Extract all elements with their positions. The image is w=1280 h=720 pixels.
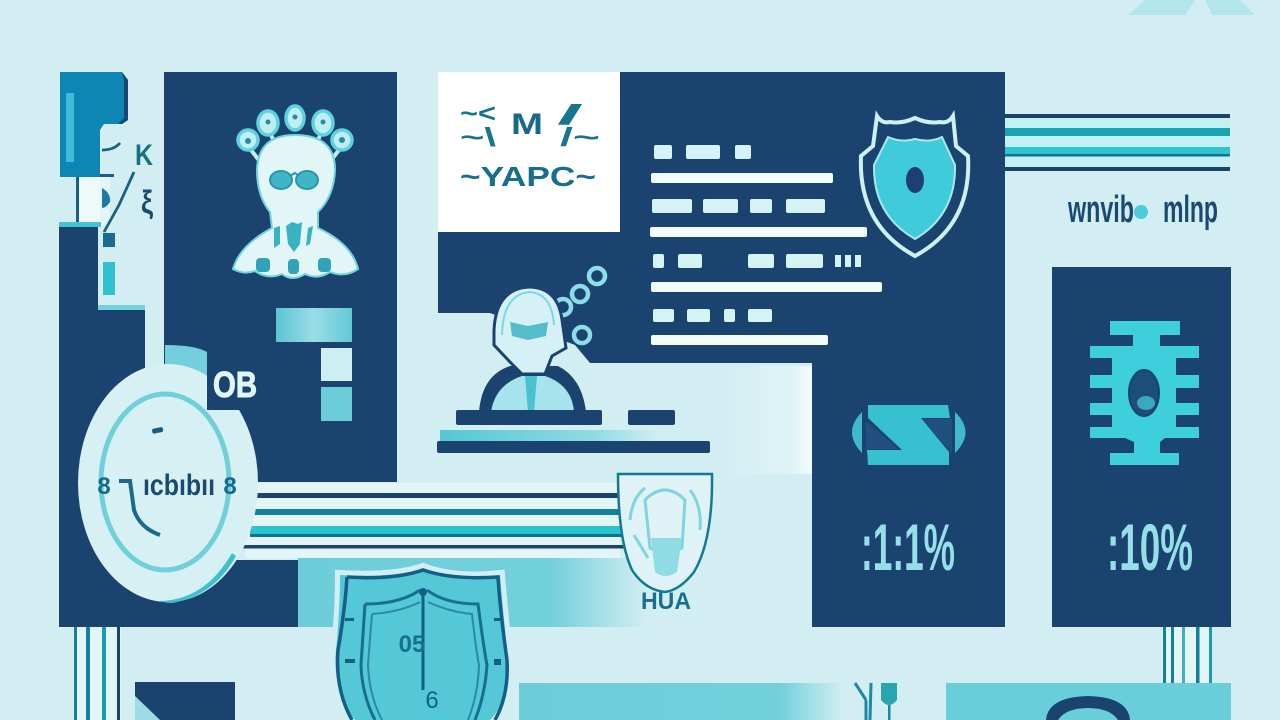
label box: [207, 360, 262, 410]
left bottom stripes: [73, 627, 121, 720]
title word: ~YAPC~: [460, 161, 596, 192]
shield caption: HUA: [641, 588, 691, 615]
stat value: right: :10%: [1107, 510, 1193, 584]
circuit connector with labels: K: [135, 139, 153, 172]
chest marks: [274, 222, 313, 252]
shield figure: [630, 488, 700, 558]
row two chips: [652, 199, 825, 213]
small shield: [618, 474, 712, 615]
shield glyphs: 05: [399, 631, 425, 658]
bottom right teal panel: [946, 683, 1231, 720]
shield mask: [651, 538, 682, 576]
glasses: [270, 171, 318, 189]
large shield: [335, 568, 508, 720]
caption right: wnvib: [1067, 189, 1134, 231]
figure: presenter at desk: [437, 268, 710, 453]
desk teal strip: [440, 430, 660, 441]
icon: bottom connector: [855, 683, 897, 720]
row two bar: [650, 227, 867, 237]
content rows: [650, 145, 882, 345]
shield spine: [345, 588, 501, 690]
right bottom stripes: [1162, 627, 1212, 683]
visor: [510, 322, 548, 340]
caption dot: [1134, 205, 1148, 219]
row one bar: [651, 173, 833, 183]
teal band: [298, 558, 648, 627]
icon: z battery: [852, 405, 966, 465]
balloon centres: [245, 114, 345, 144]
bar: medium teal: [321, 387, 352, 421]
blue header tab: [60, 72, 128, 177]
left column panel: [59, 72, 298, 627]
suit: [491, 376, 574, 412]
icon: gear chip: [1090, 321, 1199, 465]
top right cropped icon: [1128, 0, 1255, 15]
right symbol: 8: [223, 473, 237, 500]
row four bar: [651, 335, 828, 345]
desk base: [437, 441, 710, 453]
main navy panel: [438, 72, 1005, 627]
icon: shield with keyhole: [861, 116, 968, 256]
desk top bar right: [628, 410, 675, 425]
row three bar: [651, 282, 882, 292]
bar: teal: [276, 308, 352, 342]
needle: [119, 481, 160, 535]
glow patch: [725, 366, 812, 474]
inner ring: [101, 394, 229, 570]
bar: light: [321, 348, 352, 381]
head: [494, 287, 566, 374]
circuit connector with labels: ξ: [141, 184, 154, 220]
body: [233, 135, 358, 278]
caption right: mlnp: [1163, 189, 1218, 231]
stat value: centre: :1:1%: [861, 510, 955, 584]
circle gauge: [78, 310, 262, 603]
balloon strings: [248, 128, 342, 172]
right stripes: [1005, 114, 1230, 171]
title letters: M: [511, 108, 543, 141]
title slash: /: [557, 99, 584, 130]
dark arc icon: [1046, 696, 1130, 720]
teal tab: [165, 345, 207, 400]
icon: character with balloons: [233, 106, 358, 278]
row three chips: [653, 254, 861, 268]
shadow crescent: [160, 553, 236, 603]
panel: figure and bars: [164, 72, 397, 482]
gauge label: ıcbıbıı: [143, 469, 215, 502]
connector stripes to circle: [240, 483, 625, 558]
floating nodes: [555, 268, 605, 343]
desk top bar left: [456, 410, 602, 425]
bottom navy tab: [135, 682, 235, 720]
white title box: [438, 72, 620, 232]
navy stepped block: [59, 227, 298, 627]
white boxed node: [76, 174, 114, 226]
tie: [525, 376, 537, 412]
stem: [145, 310, 164, 370]
left symbol: 8: [97, 473, 111, 500]
balloons: [238, 106, 352, 150]
title tilde right: /~: [560, 122, 600, 152]
circuit connector with labels: [102, 139, 154, 295]
shield inner outline: [361, 590, 487, 720]
panel: right stat: [1052, 267, 1231, 627]
feet marks: [256, 258, 331, 274]
ellipse body: [78, 364, 258, 602]
dark body arch: [479, 366, 586, 412]
teal edge highlights: [59, 222, 145, 310]
label box: OB: [213, 364, 257, 405]
row one chips: [654, 145, 751, 159]
title scribble row two: ~\: [460, 122, 496, 152]
large shield: 6: [425, 687, 439, 714]
row four chips: [653, 309, 772, 322]
title scribble row one: ~<: [460, 98, 496, 128]
tick: [152, 427, 163, 434]
bottom teal bar: [519, 683, 844, 720]
